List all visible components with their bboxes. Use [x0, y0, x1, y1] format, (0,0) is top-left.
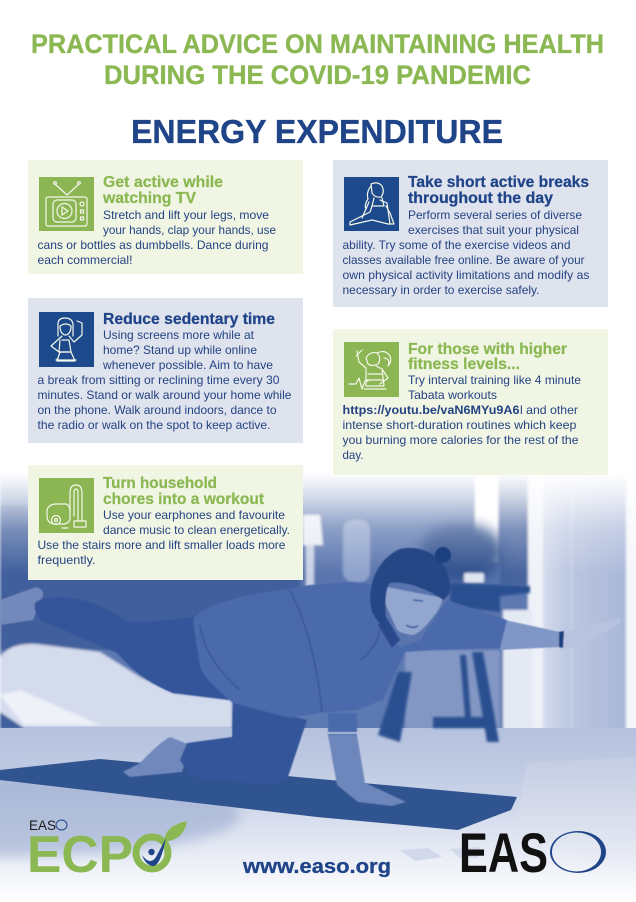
- body text: exercises that suit your physical: [408, 224, 579, 237]
- shirt: [193, 582, 507, 718]
- body text: necessary in order to exercise safely.: [342, 284, 540, 297]
- body text: Use the stairs more and lift smaller loads more: [38, 539, 286, 552]
- body text: on the phone. Walk around indoors, dance to: [38, 404, 276, 417]
- icon: woman flexing: [39, 312, 94, 367]
- supporting forearm: [328, 735, 406, 806]
- body text: [342, 374, 581, 462]
- heading: [103, 475, 264, 508]
- icon: woman with pulse line: [344, 342, 399, 397]
- woman figure: [0, 547, 621, 806]
- exercise mat: [0, 759, 517, 830]
- body text: Try interval training like 4 minute: [408, 374, 581, 387]
- heading: chores into a workout: [103, 491, 264, 508]
- body text: Tabata workouts: [408, 389, 497, 402]
- body text: intense short-duration routines which keep: [342, 419, 576, 432]
- body text: https://youtu.be/vaN6MYu9A6: [342, 404, 520, 417]
- body text: ability. Try some of the exercise videos and: [342, 239, 570, 252]
- icon: vacuum cleaner: [39, 478, 94, 533]
- heading: watching TV: [102, 190, 197, 207]
- body text: the radio or walk on the spot to keep active.: [38, 419, 270, 432]
- face: [385, 587, 443, 635]
- body text: Stretch and lift your legs, move: [103, 209, 269, 222]
- heading: [408, 341, 567, 373]
- body text: frequently.: [38, 554, 96, 567]
- heading: For those with higher: [408, 341, 567, 358]
- body text: [342, 209, 590, 297]
- title: DURING THE COVID-19 PANDEMIC: [104, 60, 531, 90]
- small EASO wordmark: EAS: [29, 817, 56, 833]
- body text: home? Stand up while online: [103, 344, 257, 357]
- floor shadow at lower left: [0, 773, 240, 857]
- white fade at top of photo: [0, 462, 636, 574]
- floor: [0, 728, 636, 902]
- leaf: [164, 821, 187, 842]
- heading: fitness levels...: [408, 356, 520, 373]
- photo: woman exercising on a mat: [0, 462, 636, 902]
- phones on floor: [400, 847, 480, 861]
- sleeve band: [328, 713, 357, 735]
- body text: classes available free online. Be aware of your: [342, 254, 585, 267]
- panel: take short active breaks: [333, 160, 608, 307]
- laptop: [515, 757, 636, 880]
- heading: [408, 174, 589, 207]
- body text: [38, 209, 276, 267]
- title: [31, 29, 604, 90]
- body text: [38, 509, 290, 567]
- website address: www.easo.org: [242, 856, 391, 878]
- heading: throughout the day: [408, 190, 553, 207]
- body text: day.: [342, 449, 364, 462]
- icon: television: [39, 177, 94, 231]
- body text: whenever possible. Aim to have: [102, 359, 273, 372]
- body text: l and other: [520, 404, 578, 417]
- facial features: [406, 600, 423, 627]
- hair bun: [435, 547, 451, 563]
- body text: Using screens more while at: [103, 329, 255, 342]
- panel: reduce sedentary time: [28, 298, 303, 443]
- body text: cans or bottles as dumbbells. Dance during: [38, 239, 268, 252]
- body text: you burning more calories for the rest of the: [342, 434, 578, 447]
- body text: [38, 329, 292, 432]
- kneeling foot: [123, 737, 190, 777]
- title: PRACTICAL ADVICE ON MAINTAINING HEALTH: [31, 29, 604, 59]
- hair: [370, 548, 450, 630]
- neck: [378, 615, 400, 648]
- body text: own physical activity limitations and modify as: [342, 269, 590, 282]
- heading: Get active while: [103, 174, 223, 191]
- leggings: [35, 597, 307, 785]
- stool and table: [378, 583, 530, 742]
- hand: [562, 618, 621, 648]
- wristband: [559, 631, 564, 648]
- shirt folds: [200, 590, 380, 712]
- body text: your hands, clap your hands, use: [103, 224, 276, 237]
- photo background room: [0, 470, 636, 760]
- heading: Take short active breaks: [408, 174, 589, 191]
- body text: dance music to clean energetically.: [103, 524, 290, 537]
- body text: minutes. Stand or walk around your home while: [38, 389, 292, 402]
- panel: for those with higher fitness levels: [333, 329, 608, 475]
- panel: get active while watching TV: [28, 160, 303, 274]
- swoosh figure: [142, 838, 166, 866]
- panel: turn household chores into a workout: [28, 465, 303, 580]
- logo: EASO ECPO: [27, 817, 187, 884]
- heading: [102, 174, 223, 207]
- body text: a break from sitting or reclining time every 30: [38, 374, 280, 387]
- heading: Reduce sedentary time: [103, 311, 275, 328]
- icon: woman stretching: [344, 177, 399, 231]
- raised foot: [0, 587, 43, 625]
- body text: Use your earphones and favourite: [103, 509, 285, 522]
- logo: EASO: EAS: [459, 821, 548, 884]
- ECPO O ring: [136, 837, 168, 869]
- section heading: ENERGY EXPENDITURE: [131, 113, 503, 150]
- heading: Turn household: [103, 475, 217, 492]
- body text: each commercial!: [38, 254, 132, 267]
- body text: Perform several series of diverse: [408, 209, 582, 222]
- ECPO letters: ECP: [27, 826, 133, 884]
- forearm skin: [500, 620, 560, 650]
